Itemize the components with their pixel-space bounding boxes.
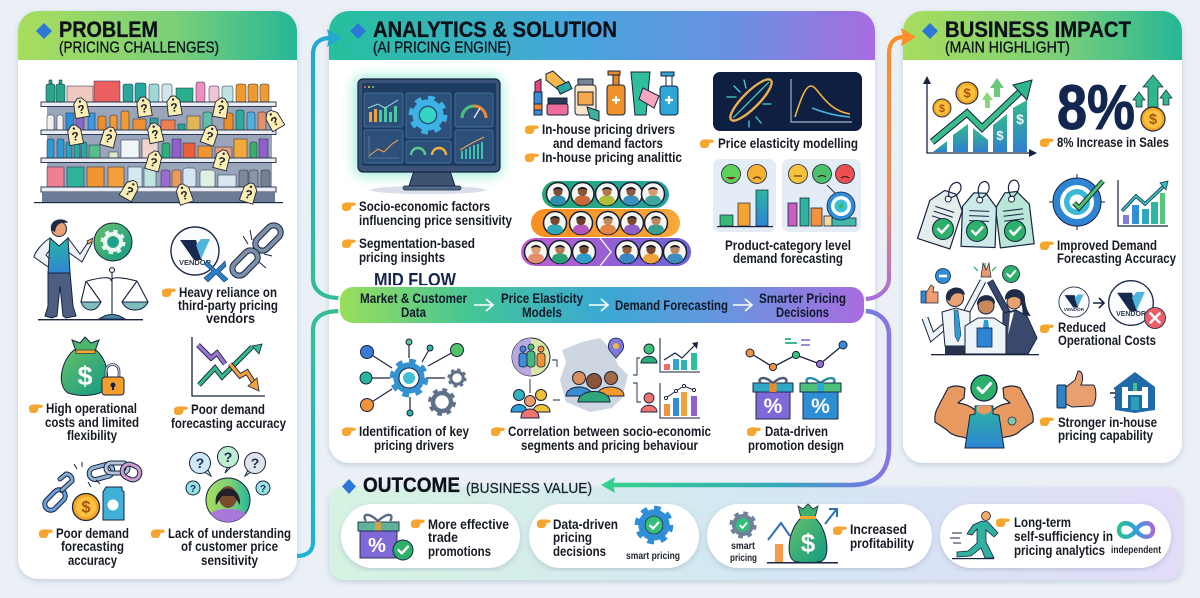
icon: smart pricing gear small (730, 514, 757, 564)
text: correlation between segments: Correlation between socio-economic (508, 423, 711, 439)
text: heavy reliance on vendors: third-party pricing (178, 297, 278, 313)
text: data-driven promotion design: promotion design (748, 437, 844, 453)
icon: smart pricing gear: smart pricing (626, 551, 680, 562)
icon: thumbs-up to in-house (1057, 371, 1155, 413)
impact heading: (MAIN HIGHLIGHT) (945, 40, 1070, 56)
flow step: market and customer data: Data (401, 304, 426, 320)
chart: sales growth with coins: $ (996, 128, 1004, 143)
icon: vendor with cross and broken chain (171, 222, 284, 282)
problem header band (18, 11, 297, 60)
icon: confused customer with question bubbles: ? (251, 455, 259, 471)
text: in-house pricing (525, 121, 682, 165)
icon: smart pricing gear small: pricing (730, 553, 757, 564)
text: stronger in-house capability: Stronger in-house (1058, 414, 1157, 430)
pill 4 label (1014, 514, 1113, 558)
icon: smart pricing gear small: smart (731, 541, 756, 552)
text: poor demand forecasting accuracy (171, 401, 286, 431)
pill 2 label: Data-driven (553, 516, 618, 532)
pill 3 label: profitability (850, 535, 914, 551)
flow step: market and customer data (360, 290, 467, 320)
chart: sales growth with coins (923, 76, 1037, 157)
text: product-category forecasting (725, 237, 851, 266)
outcome heading (342, 474, 592, 497)
chart: sales growth with coins: $ (1016, 111, 1024, 127)
icon: broken chain coin and bottle (42, 462, 142, 520)
text: identification of key drivers: Identification of key (359, 423, 469, 439)
text: heavy reliance on vendors: vendors (206, 310, 255, 326)
connector: flow to outcome arrow (601, 311, 889, 493)
illustration: strong muscle figure (935, 375, 1033, 448)
text: poor demand forecasting: accuracy (68, 552, 117, 568)
illustration: validated price tags (917, 176, 1034, 249)
text: segmentation-based pricing: pricing insights (359, 249, 445, 265)
flow step: price elasticity models (501, 290, 583, 320)
text: data-driven promotion design (747, 423, 844, 453)
text: lack of understanding (151, 525, 291, 568)
text: poor demand forecasting (39, 525, 129, 568)
problem heading (36, 17, 219, 56)
icon: money bag with padlock (61, 337, 124, 396)
text: poor demand forecasting accuracy: Poor demand (191, 401, 265, 417)
text: correlation between segments (491, 423, 711, 453)
text: in-house pricing: and demand factors (553, 135, 663, 151)
text: identification of key drivers: pricing drivers (374, 437, 454, 453)
icon: promotion gift with check: % (368, 535, 386, 557)
text: high operational costs: costs and limited (45, 414, 139, 430)
text: reduced operational costs: Reduced (1058, 319, 1106, 335)
pill 1 label: trade (428, 529, 458, 545)
connector: flow to analytics arrow (313, 29, 342, 298)
chart: improving demand forecast (1118, 180, 1168, 226)
pill 1 label: More effective (428, 516, 509, 532)
illustration: celebrating team (921, 263, 1039, 355)
impact heading (922, 17, 1132, 56)
stat: 8 percent: 8% (1057, 73, 1135, 143)
flow step: smarter pricing decisions (759, 290, 846, 320)
text: product-category forecasting: demand forecasting (733, 250, 843, 266)
illustration: promotion gifts and trend (746, 338, 847, 419)
icon: smart pricing gear (626, 509, 680, 562)
flow step: price elasticity models: Models (522, 304, 562, 320)
text: improved demand forecasting: Improved Demand (1057, 237, 1157, 253)
illustration: sentiment bars panel (713, 159, 776, 232)
impact heading: BUSINESS IMPACT (945, 17, 1132, 42)
illustration: manager with gear and scales (34, 219, 148, 320)
text: 8 percent sales increase: 8% Increase in Sales (1057, 134, 1169, 150)
pill 3 label (850, 521, 914, 551)
text: poor demand forecasting: forecasting (61, 538, 124, 554)
icon: volatile demand chart (192, 337, 265, 396)
text: socio-economic factors: Socio-economic factors (359, 198, 490, 214)
icon: key pricing drivers network (360, 339, 465, 416)
analytics heading (350, 17, 617, 56)
connector: flow to impact arrow (864, 28, 916, 299)
pill 1 label (428, 516, 509, 559)
text: socio-economic factors: influencing price sensitivity (359, 212, 512, 228)
pill 4 label: pricing analytics (1014, 542, 1105, 558)
icon: independent infinity (1111, 523, 1162, 556)
icon: profit bag with growth arrow: $ (801, 528, 816, 558)
icon: running person (950, 512, 998, 559)
panel: outcome (329, 474, 1182, 580)
flow step: demand forecasting: Demand Forecasting (615, 297, 728, 313)
heading: mid flow: MID FLOW (374, 270, 456, 290)
illustration: socio-economic map and segments (511, 338, 700, 418)
text: high operational costs: High operational (46, 400, 137, 416)
analytics heading: ANALYTICS & SOLUTION (373, 17, 617, 42)
icon: profit bag with growth arrow (767, 504, 838, 564)
icon: independent infinity: independent (1111, 545, 1162, 556)
text: product-category forecasting: Product-category level (725, 237, 851, 253)
flow step: smarter pricing decisions: Decisions (776, 304, 829, 320)
text: heavy reliance on vendors: Heavy reliance on (179, 284, 277, 300)
problem heading: PROBLEM (59, 17, 158, 42)
illustration: store shelves with question tags (34, 80, 285, 205)
pill: more effective trade promotions (341, 504, 520, 568)
pill 3 label: Increased (850, 521, 907, 537)
text: in-house pricing: In-house pricing analittic (542, 149, 682, 165)
pill: data-driven pricing decisions (529, 504, 699, 568)
icon: up arrows and coin (1133, 75, 1172, 131)
flow bar (338, 285, 866, 325)
pill 2 label: decisions (553, 543, 606, 559)
flow step: smarter pricing decisions: Smarter Pricing (759, 290, 846, 306)
text: data-driven promotion design: Data-driven (765, 423, 828, 439)
illustration: analytics dashboard monitor (354, 76, 502, 194)
text: poor demand forecasting accuracy: forecasting accuracy (171, 415, 286, 431)
arrow 3 (733, 299, 752, 311)
icon: confused customer with question bubbles: ? (224, 449, 232, 465)
impact header band (903, 11, 1182, 60)
text: heavy reliance on vendors (162, 284, 278, 326)
pill 2 label (553, 516, 618, 559)
icon: promotion gift with check (358, 515, 413, 560)
text: improved demand forecasting (1040, 237, 1176, 266)
arrow 1 (474, 299, 493, 311)
pill 1 label: promotions (428, 543, 491, 559)
text: reduced operational costs (1040, 319, 1156, 348)
icon: money bag with padlock: $ (77, 361, 93, 391)
text: stronger in-house capability (1040, 414, 1157, 443)
pill: long-term self-sufficiency (940, 504, 1171, 568)
icon: confused customer with question bubbles: ? (260, 484, 266, 495)
flow step: market and customer data: Market & Customer (360, 290, 467, 306)
text: high operational costs (29, 400, 139, 443)
illustration: customer segment pills (521, 181, 691, 266)
icon: vendor transition (1059, 281, 1166, 328)
text: segmentation-based pricing (342, 235, 475, 265)
analytics header band (329, 11, 875, 60)
panel: analytics and solution (329, 11, 875, 463)
text: improved demand forecasting: Forecasting Accuracy (1057, 250, 1176, 266)
text: lack of understanding: of customer price (181, 538, 278, 554)
text: reduced operational costs: Operational Costs (1058, 332, 1156, 348)
text: identification of key drivers (342, 423, 469, 453)
illustration: products with target panel (782, 159, 861, 232)
text: correlation between segments: segments and pricing behaviour (521, 437, 698, 453)
pill 4 label: self-sufficiency in (1014, 528, 1113, 544)
icon: target with check (1049, 174, 1105, 230)
text: in-house pricing: In-house pricing drivers (542, 121, 675, 137)
flow step: price elasticity models: Price Elasticity (501, 290, 583, 306)
text: lack of understanding: Lack of understanding (168, 525, 291, 541)
panel: business impact (903, 11, 1182, 463)
arrow 2 (589, 299, 608, 311)
illustration: price elasticity neon panel (713, 72, 862, 131)
icon: confused customer with question bubbles: ? (190, 484, 196, 495)
panel: problem (18, 11, 297, 579)
illustration: cosmetics and tagged products (534, 71, 678, 121)
icon: confused customer with question bubbles (186, 446, 270, 522)
text: price elasticity modelling: Price elasticity modelling (718, 135, 858, 151)
pill 2 label: pricing (553, 529, 592, 545)
text: high operational costs: flexibility (67, 427, 117, 443)
problem heading: (PRICING CHALLENGES) (59, 40, 219, 56)
pill: increased profitability (707, 504, 932, 568)
analytics heading: (AI PRICING ENGINE) (373, 40, 511, 56)
connector: problem to flow (297, 311, 340, 556)
text: lack of understanding: sensitivity (201, 552, 258, 568)
text: socio-economic factors (342, 198, 512, 228)
outcome heading: (BUSINESS VALUE) (466, 480, 592, 497)
outcome heading: OUTCOME (363, 474, 460, 497)
pill 4 label: Long-term (1014, 514, 1071, 530)
text: poor demand forecasting: Poor demand (56, 525, 129, 541)
text: stronger in-house capability: pricing capability (1058, 427, 1153, 443)
icon: confused customer with question bubbles: ? (196, 455, 204, 471)
illustration: promotion gifts and trend: % (811, 395, 830, 418)
text: segmentation-based pricing: Segmentation-based (359, 235, 475, 251)
